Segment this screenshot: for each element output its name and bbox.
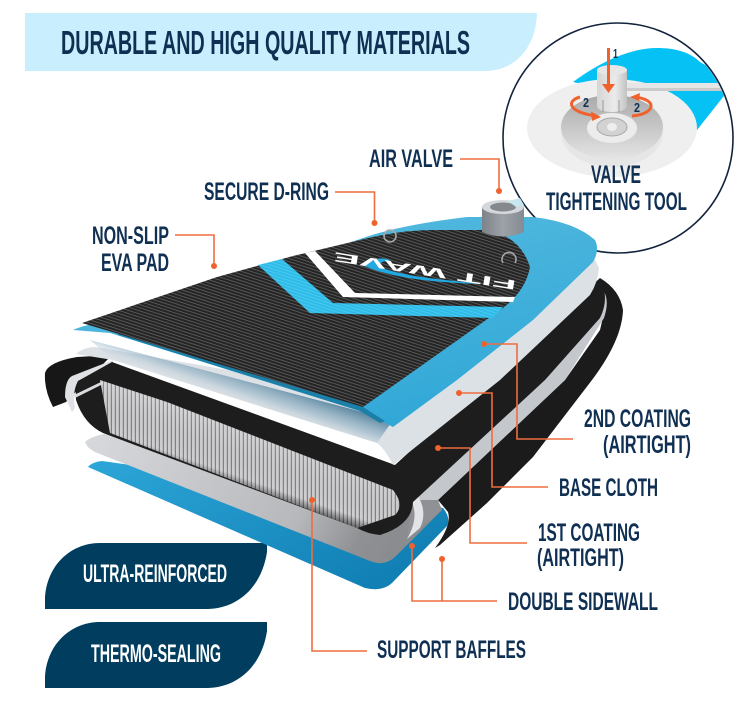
layer: left white loop	[65, 360, 113, 412]
layer: grey sidewall strip	[410, 290, 607, 520]
callout: 2nd coating: 2ND COATING	[584, 405, 691, 433]
layer: lower blue sidewall	[88, 461, 448, 589]
callout: air valve	[369, 145, 502, 194]
callout: non-slip EVA pad	[92, 222, 217, 277]
callout: 1st coating: (AIRTIGHT)	[537, 544, 624, 572]
icon: tightening tool	[597, 65, 725, 112]
arrows: rotate	[572, 97, 651, 116]
inset: valve tightening tool	[503, 23, 735, 253]
tool step numbers: 1	[613, 46, 618, 61]
arrow: press down	[602, 48, 615, 93]
sidewall shaded seam	[407, 500, 442, 539]
callout: 1st coating	[435, 445, 640, 572]
callout: support baffles	[309, 497, 526, 664]
tool step numbers: 2	[634, 100, 640, 115]
callout: non-slip EVA pad: NON-SLIP	[92, 222, 169, 250]
deck edge shadow	[118, 332, 385, 423]
deck: logo swoosh	[362, 258, 482, 284]
callout: air valve: AIR VALVE	[369, 145, 453, 173]
callout: 2nd coating	[481, 341, 691, 459]
callout: secure D-ring	[204, 178, 378, 226]
callout: support baffles: SUPPORT BAFFLES	[377, 636, 526, 664]
callout: 2nd coating: (AIRTIGHT)	[603, 431, 691, 459]
layer: black foam core	[76, 278, 605, 535]
layer: lower grey coating	[85, 434, 442, 563]
icon: blue board behind the tool	[573, 48, 735, 130]
layer: outer black sidewall	[435, 278, 623, 548]
white strap across foam end	[74, 381, 103, 398]
callout: secure D-ring: SECURE D-RING	[204, 178, 329, 206]
layer: left black flap	[45, 355, 112, 407]
inset caption: VALVE	[591, 161, 641, 189]
callout: 1st coating: 1ST COATING	[538, 519, 640, 547]
white curl of sidewall	[407, 494, 423, 539]
callout: base cloth: BASE CLOTH	[559, 474, 658, 502]
callout: double sidewall: DOUBLE SIDEWALL	[508, 588, 658, 616]
layer: support baffles	[100, 380, 400, 528]
title banner	[25, 13, 537, 71]
base cloth shadow under deck	[90, 340, 393, 443]
title text: DURABLE AND HIGH QUALITY MATERIALS	[61, 24, 470, 61]
layer: black EVA deck	[82, 230, 530, 407]
callout: double sidewall	[409, 543, 658, 616]
paddle board cross-section	[45, 198, 623, 589]
callout: non-slip EVA pad: EVA PAD	[101, 249, 169, 277]
layer: base cloth	[76, 250, 599, 465]
deck: brand logo: FIT WAVE	[331, 249, 517, 293]
badge: ultra-reinforced	[45, 543, 267, 609]
deck: white chevron	[305, 251, 515, 302]
badge: ultra-reinforced: ULTRA-REINFORCED	[83, 560, 227, 588]
tool step numbers	[583, 46, 640, 115]
badge: thermo-sealing: THERMO-SEALING	[91, 640, 221, 668]
tool step numbers: 2	[583, 95, 589, 110]
layer: blue coating	[73, 217, 597, 427]
deck: blue chevron	[258, 259, 503, 318]
icon: valve base	[527, 79, 697, 177]
callout: base cloth	[456, 390, 658, 502]
icon: D-rings	[384, 230, 516, 263]
icon: air valve	[482, 198, 524, 236]
badge: thermo-sealing	[45, 622, 267, 688]
